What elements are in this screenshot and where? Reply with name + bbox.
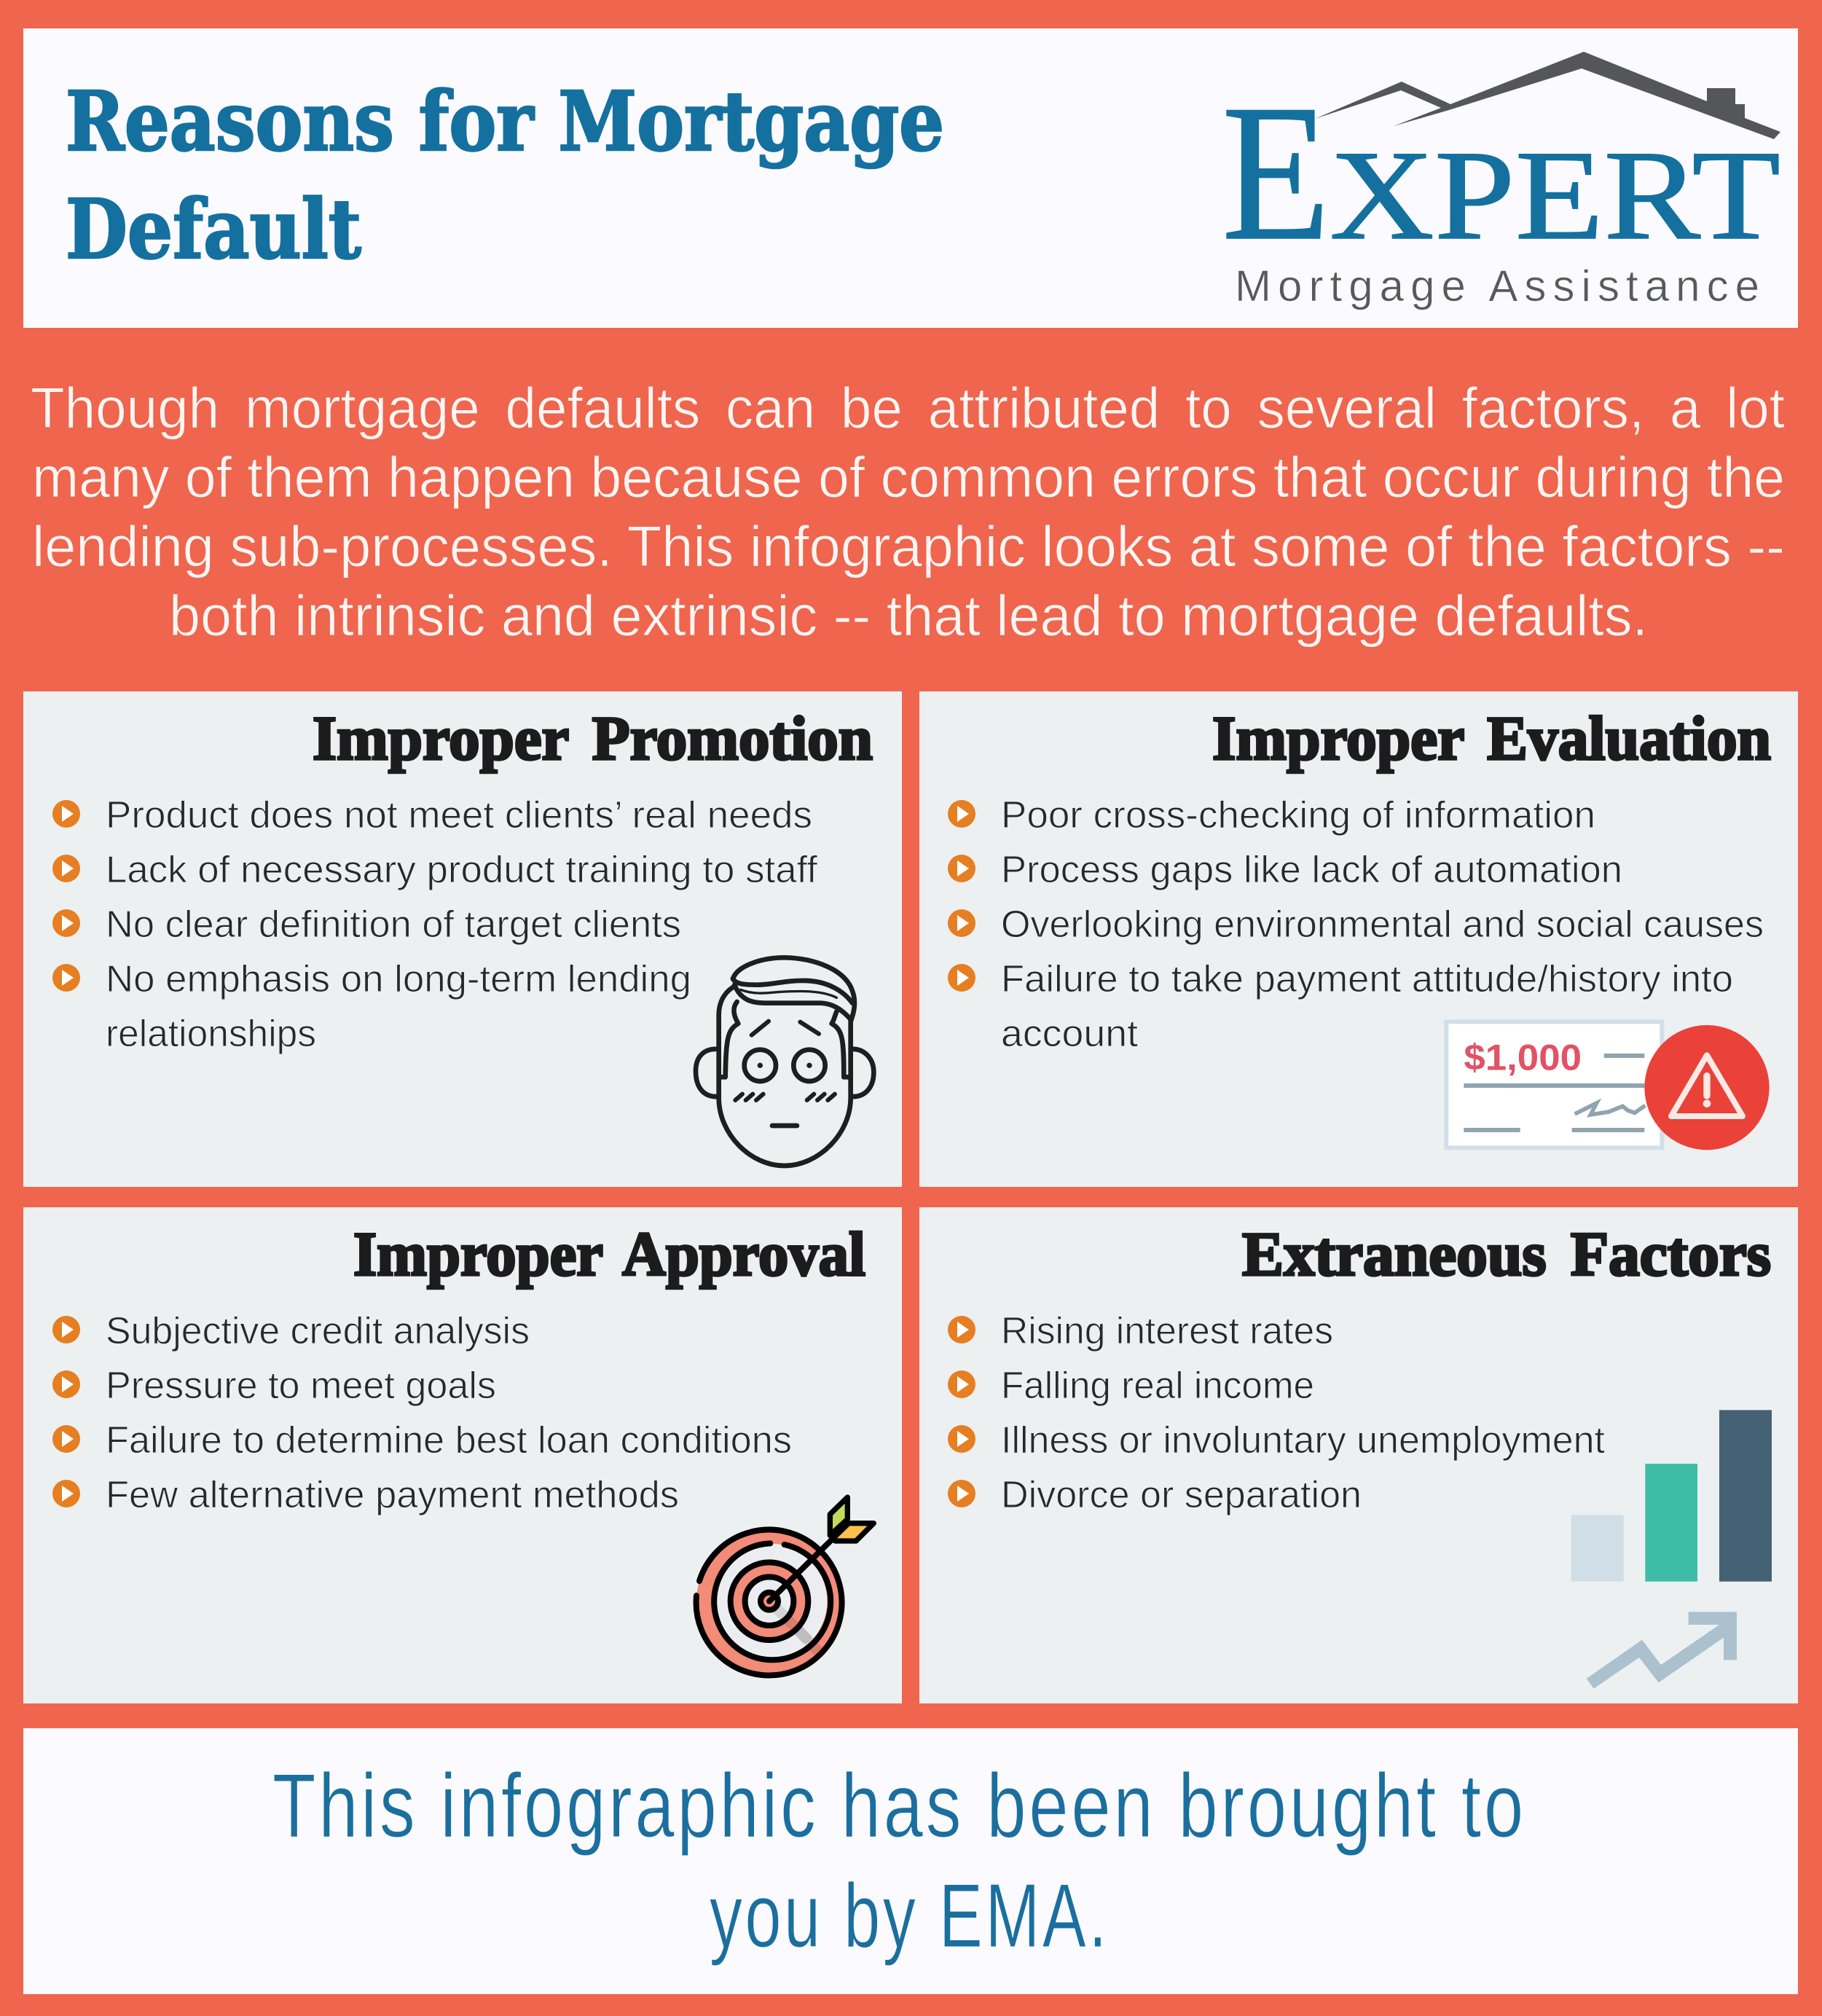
panel: Improper Promotion (23, 691, 902, 1187)
header panel (23, 28, 1798, 328)
bullet list (948, 1310, 1606, 1516)
icon: target with arrow (696, 1497, 873, 1676)
bullet list (52, 794, 818, 1055)
bullet list: Failure to determine best loan conditions (106, 1419, 792, 1462)
bullet list: Process gaps like lack of automation (1001, 849, 1622, 891)
bullet list: Pressure to meet goals (106, 1365, 496, 1407)
bullet list: Failure to take payment attitude/history into (1001, 958, 1733, 1000)
logo: Expert Mortgage Assistance (1222, 52, 1780, 310)
bullet list (52, 1310, 792, 1516)
bullet list: Illness or involuntary unemployment (1001, 1419, 1606, 1462)
intro paragraph: both intrinsic and extrinsic -- that lead to mortgage defaults. (169, 583, 1648, 648)
footer text (272, 1756, 1526, 1966)
intro paragraph (31, 375, 1785, 648)
bullet list: relationships (106, 1013, 316, 1055)
bullet list: Falling real income (1001, 1365, 1314, 1407)
logo tagline: Mortgage Assistance (1235, 262, 1759, 310)
bullet list: Subjective credit analysis (106, 1310, 530, 1352)
bullet list: Product does not meet clients’ real needs (106, 794, 812, 836)
panel: Improper Approval (23, 1207, 902, 1703)
bullet list: No clear definition of target clients (106, 903, 681, 946)
bullet list: Rising interest rates (1001, 1310, 1333, 1352)
title: Reasons for Mortgage (66, 74, 944, 170)
icon: worried face (696, 957, 873, 1166)
bullet list: Poor cross-checking of information (1001, 794, 1595, 836)
panel: Improper Evaluation (919, 691, 1798, 1187)
icon: rising bar chart with arrow (1571, 1410, 1772, 1689)
heading: Improper Promotion: Improper Promotion (313, 703, 873, 773)
bullet list: Overlooking environmental and social causes (1001, 903, 1764, 946)
heading: Extraneous Factors: Extraneous Factors (1242, 1219, 1771, 1289)
title: Default (66, 182, 361, 278)
icon: house roof (1315, 52, 1780, 139)
bullet list: Divorce or separation (1001, 1474, 1362, 1516)
bullet list: Lack of necessary product training to staff (106, 849, 818, 891)
intro paragraph: lending sub-processes. This infographic looks at some of the factors -- (32, 514, 1785, 578)
heading: Improper Evaluation: Improper Evaluation (1212, 703, 1771, 773)
bullet list: account (1001, 1013, 1139, 1055)
bullet list: No emphasis on long-term lending (106, 958, 691, 1000)
logo wordmark: XPERT (1330, 125, 1780, 267)
footer panel (23, 1728, 1798, 1994)
bullet list (948, 794, 1764, 1055)
bullet list: Few alternative payment methods (106, 1474, 679, 1516)
panel: Extraneous Factors (919, 1207, 1798, 1703)
logo letter E: E (1222, 64, 1330, 281)
intro paragraph: many of them happen because of common errors that occur during the (32, 444, 1785, 509)
intro paragraph: Though mortgage defaults can be attributed to several factors, a lot (31, 375, 1785, 440)
footer text: you by EMA. (710, 1866, 1110, 1966)
icon: check with warning sign: $1,000 (1464, 1037, 1582, 1078)
icon: check with warning sign (1446, 1021, 1770, 1150)
heading: Improper Approval: Improper Approval (353, 1219, 865, 1289)
title (66, 74, 944, 278)
